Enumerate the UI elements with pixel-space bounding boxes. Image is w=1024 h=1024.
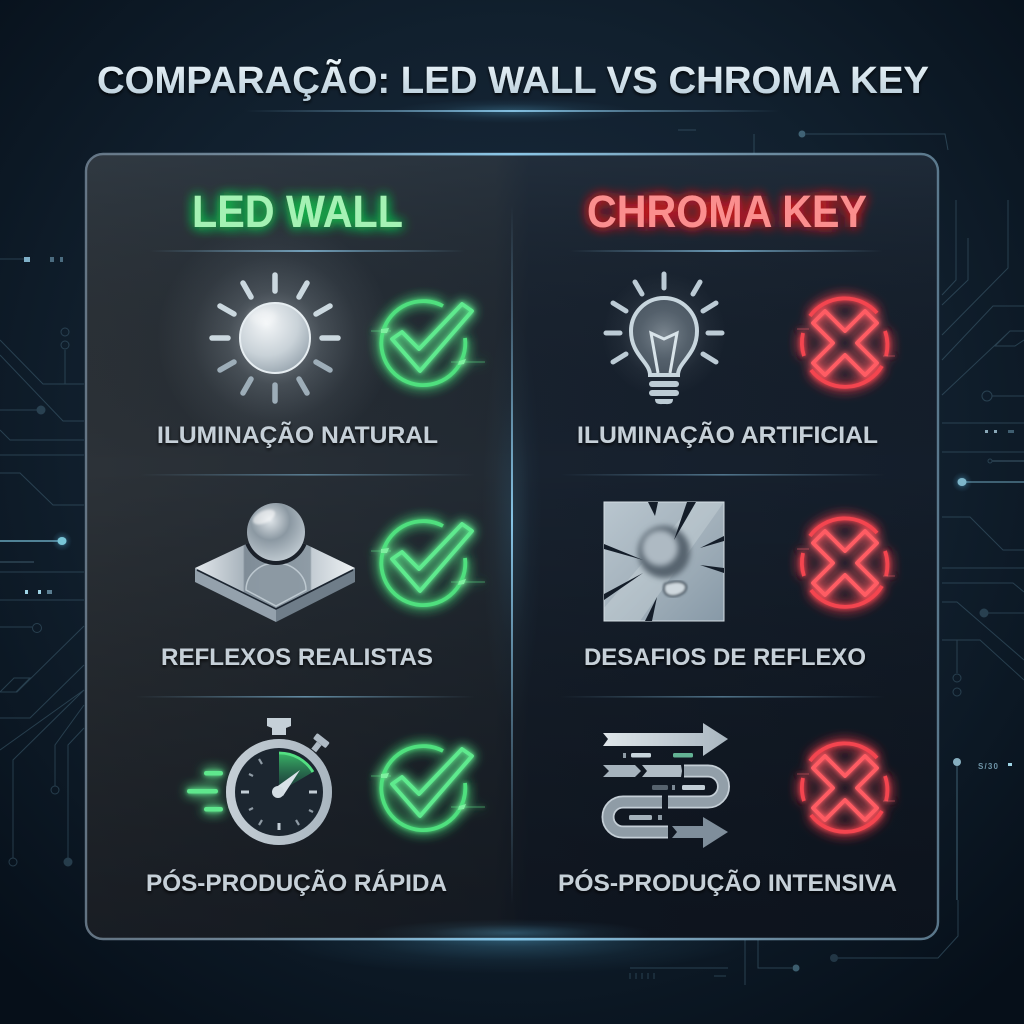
circuit node: left bright xyxy=(0,257,72,594)
icon: sun xyxy=(157,220,393,456)
heading: LED WALL: LED WALL xyxy=(192,186,403,237)
column divider xyxy=(482,205,542,905)
icon: red cross 3 xyxy=(797,743,895,832)
icon: red cross 2 xyxy=(797,518,895,607)
icon: winding workflow arrows xyxy=(603,723,728,848)
icon: green check 2 xyxy=(371,521,485,605)
label: desafios de reflexo: DESAFIOS DE REFLEXO xyxy=(584,644,866,671)
heading: CHROMA KEY: CHROMA KEY xyxy=(587,186,867,237)
icon: red cross 1 xyxy=(797,298,895,387)
icon: shattered reflective square xyxy=(604,502,724,621)
icon: stopwatch xyxy=(187,718,332,845)
circuit traces: top and bottom xyxy=(630,130,958,985)
circuit traces: left xyxy=(0,259,84,866)
label: pós-produção intensiva: PÓS-PRODUÇÃO INTENSIVA xyxy=(558,869,897,897)
label: iluminação artificial: ILUMINAÇÃO ARTIFICIAL xyxy=(577,421,878,449)
icon: sphere on reflective plate xyxy=(195,499,355,622)
title underline xyxy=(245,99,780,123)
label: iluminação natural: ILUMINAÇÃO NATURAL xyxy=(157,421,438,449)
icon: green check 3 xyxy=(371,746,485,830)
icon: green check 1 xyxy=(371,301,485,385)
panel: comparison xyxy=(86,153,938,974)
title: COMPARAÇÃO: LED WALL VS CHROMA KEY xyxy=(97,58,929,102)
label: reflexos realistas: REFLEXOS REALISTAS xyxy=(161,644,433,671)
circuit nodes: right bright xyxy=(952,430,1024,900)
circuit nodes: right bright: S/30 xyxy=(978,762,999,771)
icon: bulb xyxy=(602,273,726,404)
circuit traces: right xyxy=(942,200,1024,696)
label: pós-produção rápida: PÓS-PRODUÇÃO RÁPIDA xyxy=(146,869,447,897)
row dividers xyxy=(135,250,885,698)
